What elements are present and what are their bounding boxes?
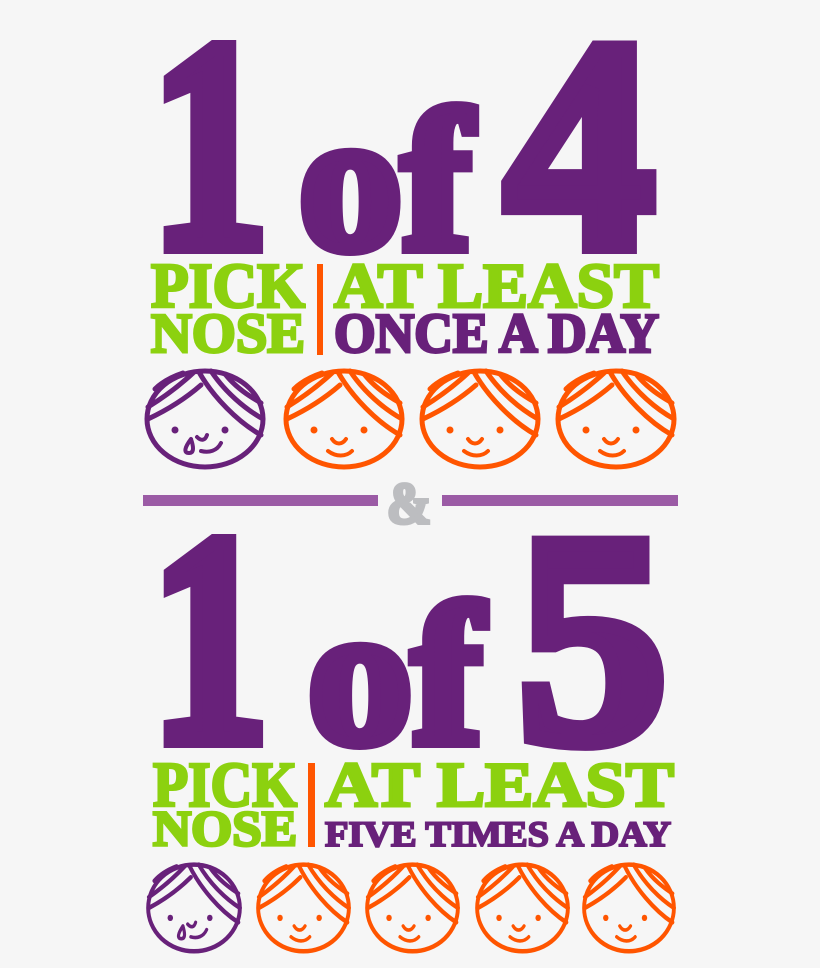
- label: at least once a day: [334, 250, 659, 365]
- icon: purple face nose picking: [144, 368, 266, 470]
- title: 1 of 5: 5: [518, 473, 667, 805]
- title: 1 of 5: of: [308, 565, 484, 786]
- label: at least once a day: ONCE A DAY: [334, 303, 659, 365]
- label: at least once a day: AT LEAST: [334, 250, 659, 321]
- ampersand: &: [387, 471, 431, 536]
- separator lines: [143, 495, 678, 506]
- label: pick nose: [151, 250, 305, 365]
- title: 1 of 5: [151, 473, 667, 805]
- title: 1 of 5: 1: [151, 473, 269, 805]
- label: at least five times a day: [325, 749, 674, 854]
- label: at least five times a day: FIVE TIMES A DAY: [325, 814, 671, 854]
- label: pick nose 2: NOSE: [153, 800, 297, 856]
- label: pick nose 2: [153, 749, 297, 856]
- faces row 1: [147, 371, 674, 467]
- title: 1 of 4: of: [299, 71, 473, 292]
- icon: purple face nose picking 2: [146, 862, 242, 954]
- label: pick nose: PICK: [151, 250, 305, 321]
- icon: orange faces 2: [258, 865, 674, 951]
- divider bar orange: [317, 264, 323, 355]
- divider bar orange 2: [308, 763, 315, 847]
- label: pick nose 2: PICK: [153, 749, 297, 820]
- faces row 2: [148, 865, 674, 951]
- label: at least five times a day: AT LEAST: [325, 749, 674, 820]
- icon: orange faces: [286, 371, 674, 467]
- title: 1 of 4: [151, 0, 654, 311]
- label: pick nose: NOSE: [151, 303, 305, 365]
